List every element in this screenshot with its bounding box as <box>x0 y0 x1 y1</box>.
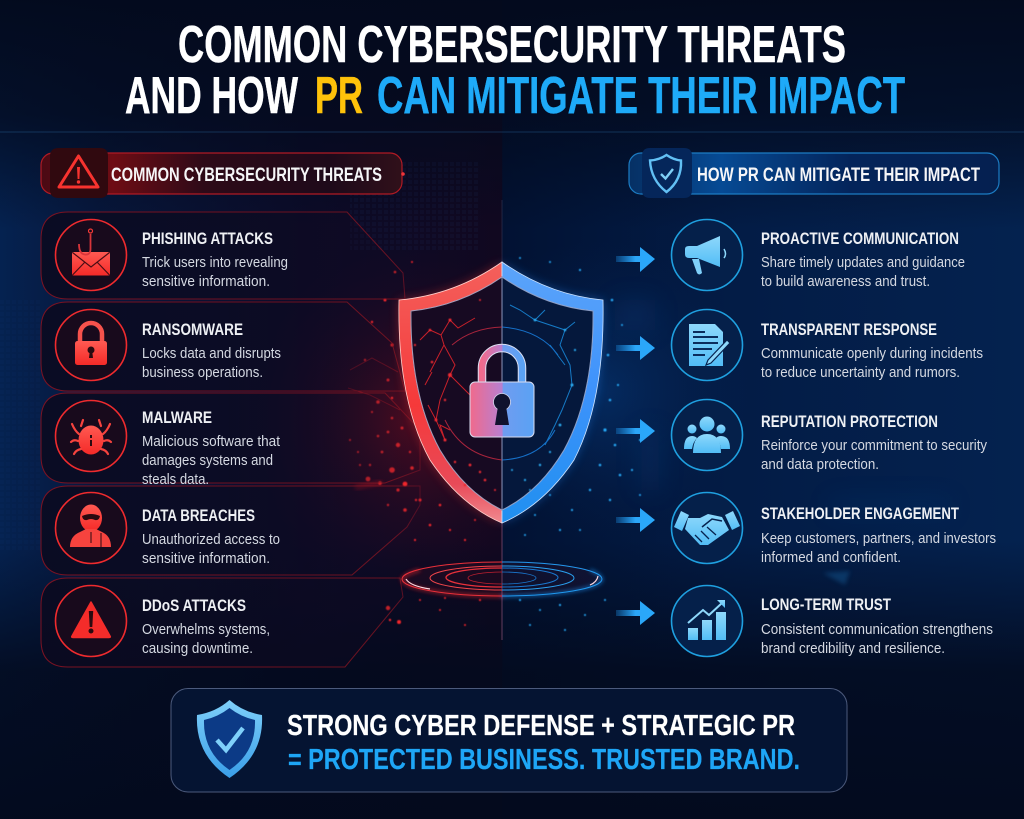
icon: document and pen <box>689 324 730 366</box>
callout text: STRONG CYBER DEFENSE + STRATEGIC PR <box>287 710 795 742</box>
icon: padlock <box>75 323 107 365</box>
mitigation row: transparent response: to reduce uncertainty and rumors. <box>761 364 960 381</box>
callout text <box>287 710 800 776</box>
threat card: phishing attacks: PHISHING ATTACKS <box>142 229 273 248</box>
icon: hooded hacker <box>70 504 111 547</box>
threats header <box>41 148 405 198</box>
callout: bottom banner <box>171 688 847 792</box>
threat card: data breaches <box>41 486 420 575</box>
threat card: ddos attacks <box>41 578 403 667</box>
mitigation row: proactive communication: Share timely updates and guidance <box>761 254 965 271</box>
threat card: malware: Malicious software that <box>142 433 281 450</box>
mitigation header <box>629 148 999 198</box>
callout text: = PROTECTED BUSINESS. TRUSTED BRAND. <box>288 744 800 776</box>
threat card: ransomware: business operations. <box>142 364 263 381</box>
threat card: data breaches: sensitive information. <box>142 550 270 567</box>
mitigation row: stakeholder engagement: Keep customers, partners, and investors <box>761 530 996 547</box>
arrow <box>616 336 655 360</box>
threat card: malware: MALWARE <box>142 408 212 427</box>
mitigation row: long-term trust: brand credibility and resilience. <box>761 640 945 657</box>
mitigation row: long-term trust: LONG-TERM TRUST <box>761 595 891 614</box>
mitigation row: long-term trust: Consistent communication strengthens <box>761 621 993 638</box>
threat card: malware <box>41 393 420 488</box>
threat card: ddos attacks: causing downtime. <box>142 640 253 657</box>
mitigation row: reputation protection: REPUTATION PROTECTION <box>761 412 938 431</box>
icon: phishing hook and envelope <box>72 229 110 276</box>
icon: growth chart <box>688 600 726 640</box>
mitigation row: stakeholder engagement: STAKEHOLDER ENGAGEMENT <box>761 504 959 523</box>
threat card: phishing attacks: sensitive information. <box>142 273 270 290</box>
threat card: malware: damages systems and <box>142 452 273 469</box>
icon: handshake <box>674 511 740 545</box>
threat card: phishing attacks: Trick users into revealing <box>142 254 288 271</box>
mitigation row: proactive communication: to build awareness and trust. <box>761 273 930 290</box>
threat card: phishing attacks <box>41 212 405 299</box>
threat card: ddos attacks: Overwhelms systems, <box>142 621 270 638</box>
threats heading text: COMMON CYBERSECURITY THREATS <box>111 164 382 186</box>
platform rings <box>402 561 602 596</box>
title: AND HOW <box>125 67 299 125</box>
lock icon <box>470 348 534 437</box>
arrow <box>616 419 655 443</box>
mitigation row: transparent response: Communicate openly during incidents <box>761 345 983 362</box>
icon: shield with check <box>650 155 681 192</box>
threat card: ddos attacks: DDoS ATTACKS <box>142 596 246 615</box>
arrow <box>616 601 655 625</box>
icon: megaphone <box>685 236 726 274</box>
central shield with lock <box>399 262 603 523</box>
threat card: ransomware: Locks data and disrupts <box>142 345 281 362</box>
threat card: data breaches: DATA BREACHES <box>142 506 255 525</box>
threat card: data breaches: Unauthorized access to <box>142 531 280 548</box>
mitigation row: reputation protection: Reinforce your commitment to security <box>761 437 987 454</box>
threat card: malware: steals data. <box>142 471 209 488</box>
panel: common cybersecurity threats <box>41 148 420 667</box>
title: PR <box>315 67 363 125</box>
mitigation row: proactive communication <box>616 220 965 290</box>
icon: shield with check <box>197 700 262 778</box>
icon: bug <box>71 420 111 454</box>
mitigation row: transparent response <box>616 310 983 381</box>
arrow <box>616 247 655 272</box>
mitigation row: stakeholder engagement <box>616 492 996 566</box>
panel: how PR can mitigate <box>616 148 999 657</box>
mitigation row: stakeholder engagement: informed and confident. <box>761 549 901 566</box>
mitigation row: proactive communication: PROACTIVE COMMUNICATION <box>761 229 959 248</box>
title <box>125 16 905 125</box>
mitigation row: long-term trust <box>616 586 993 657</box>
icon: warning triangle <box>59 156 98 187</box>
mitigation row: reputation protection <box>616 400 987 473</box>
icon: warning sign <box>72 602 110 638</box>
threat card: ransomware <box>41 302 405 391</box>
icon: group of people <box>684 416 730 453</box>
mitigation row: reputation protection: and data protection. <box>761 456 879 473</box>
mitigation row: transparent response: TRANSPARENT RESPONSE <box>761 320 937 339</box>
arrow <box>616 508 655 532</box>
threat card: ransomware: RANSOMWARE <box>142 320 243 339</box>
